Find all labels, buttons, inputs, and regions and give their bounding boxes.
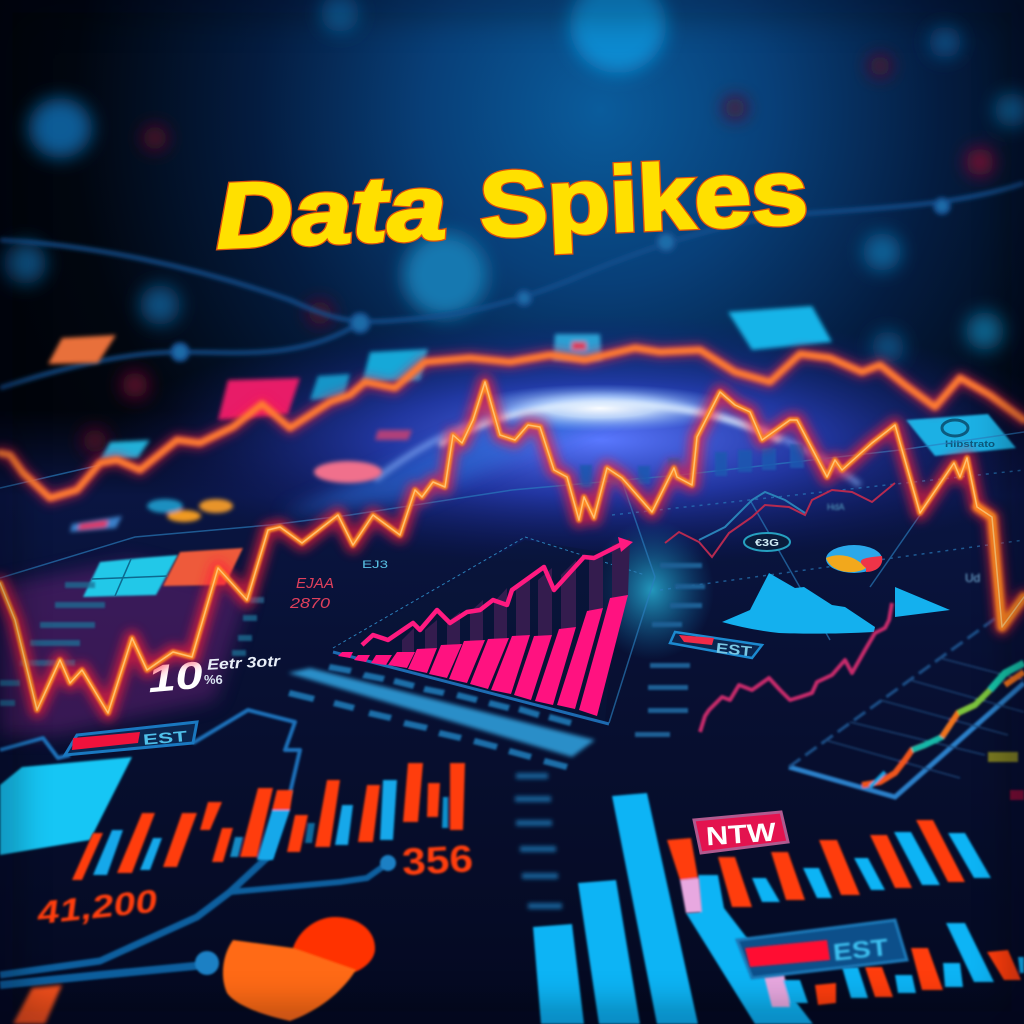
right grouped bars xyxy=(718,820,991,907)
pink bars xyxy=(338,595,628,716)
grouped bars xyxy=(72,763,465,880)
top-left cyan panel xyxy=(0,757,132,855)
coin badge xyxy=(744,533,790,551)
upper spike line xyxy=(0,348,1024,498)
left data panel: EJAA xyxy=(296,575,334,592)
value label: 10 xyxy=(146,655,205,701)
coin badge: €3G xyxy=(755,538,779,549)
left badge: EST xyxy=(142,728,188,749)
lower-right multicolor chart xyxy=(789,615,1024,800)
bottom-left panel outline xyxy=(0,710,300,853)
distant bars behind the spike xyxy=(580,444,804,487)
axis labels right of pink chart: Ud xyxy=(965,571,980,585)
pink-red trend line xyxy=(700,603,892,732)
title: Data xyxy=(214,156,448,268)
value labels: 41,200 xyxy=(34,883,159,931)
lower spike line xyxy=(0,382,1024,713)
right info tile: Hibstrato xyxy=(945,439,996,449)
lower right bars xyxy=(762,923,1024,1007)
heart-shaped pie chart xyxy=(223,917,375,1021)
data tape xyxy=(288,668,595,757)
mid-right pie chart xyxy=(826,545,882,573)
left data panel: EJ3 xyxy=(362,559,388,571)
mid-right blue mountain chart xyxy=(722,573,950,634)
right info tile xyxy=(906,414,1016,456)
mid badge: EST xyxy=(715,640,753,659)
NTW badge xyxy=(694,812,788,853)
lower badge xyxy=(737,920,907,978)
thin red trend line xyxy=(665,483,895,557)
value labels xyxy=(34,838,474,931)
horizon light burst xyxy=(375,384,860,485)
left data panel: Eetr 3otr xyxy=(207,653,282,674)
NTW badge: NTW xyxy=(705,816,777,851)
axis labels right of pink chart xyxy=(635,502,980,737)
bokeh data particles xyxy=(4,0,1024,453)
left badge xyxy=(65,722,197,755)
axis labels right of pink chart: HdA xyxy=(827,502,845,512)
pink perspective bar chart xyxy=(288,537,645,770)
bottom-left corner bar xyxy=(13,985,62,1024)
floating tiles xyxy=(48,306,832,460)
left data panel xyxy=(0,548,388,706)
large blue bar chart xyxy=(498,765,813,1024)
lower badge: EST xyxy=(832,934,890,967)
dark backing bars xyxy=(402,538,630,652)
left data panel: 2870 xyxy=(289,595,331,612)
title: Spikes xyxy=(478,141,810,257)
left data panel: %6 xyxy=(204,672,223,687)
title: Data xyxy=(214,156,448,268)
mid badge xyxy=(670,632,762,659)
bottom connector arrows xyxy=(0,853,396,985)
main orange spike lines xyxy=(0,348,1024,713)
title: Spikes xyxy=(478,141,810,257)
small pie tokens xyxy=(70,430,412,532)
background network lines xyxy=(0,183,1024,388)
thin grid lines on floor xyxy=(0,432,1024,723)
value labels: 356 xyxy=(401,838,474,884)
title xyxy=(214,141,810,268)
